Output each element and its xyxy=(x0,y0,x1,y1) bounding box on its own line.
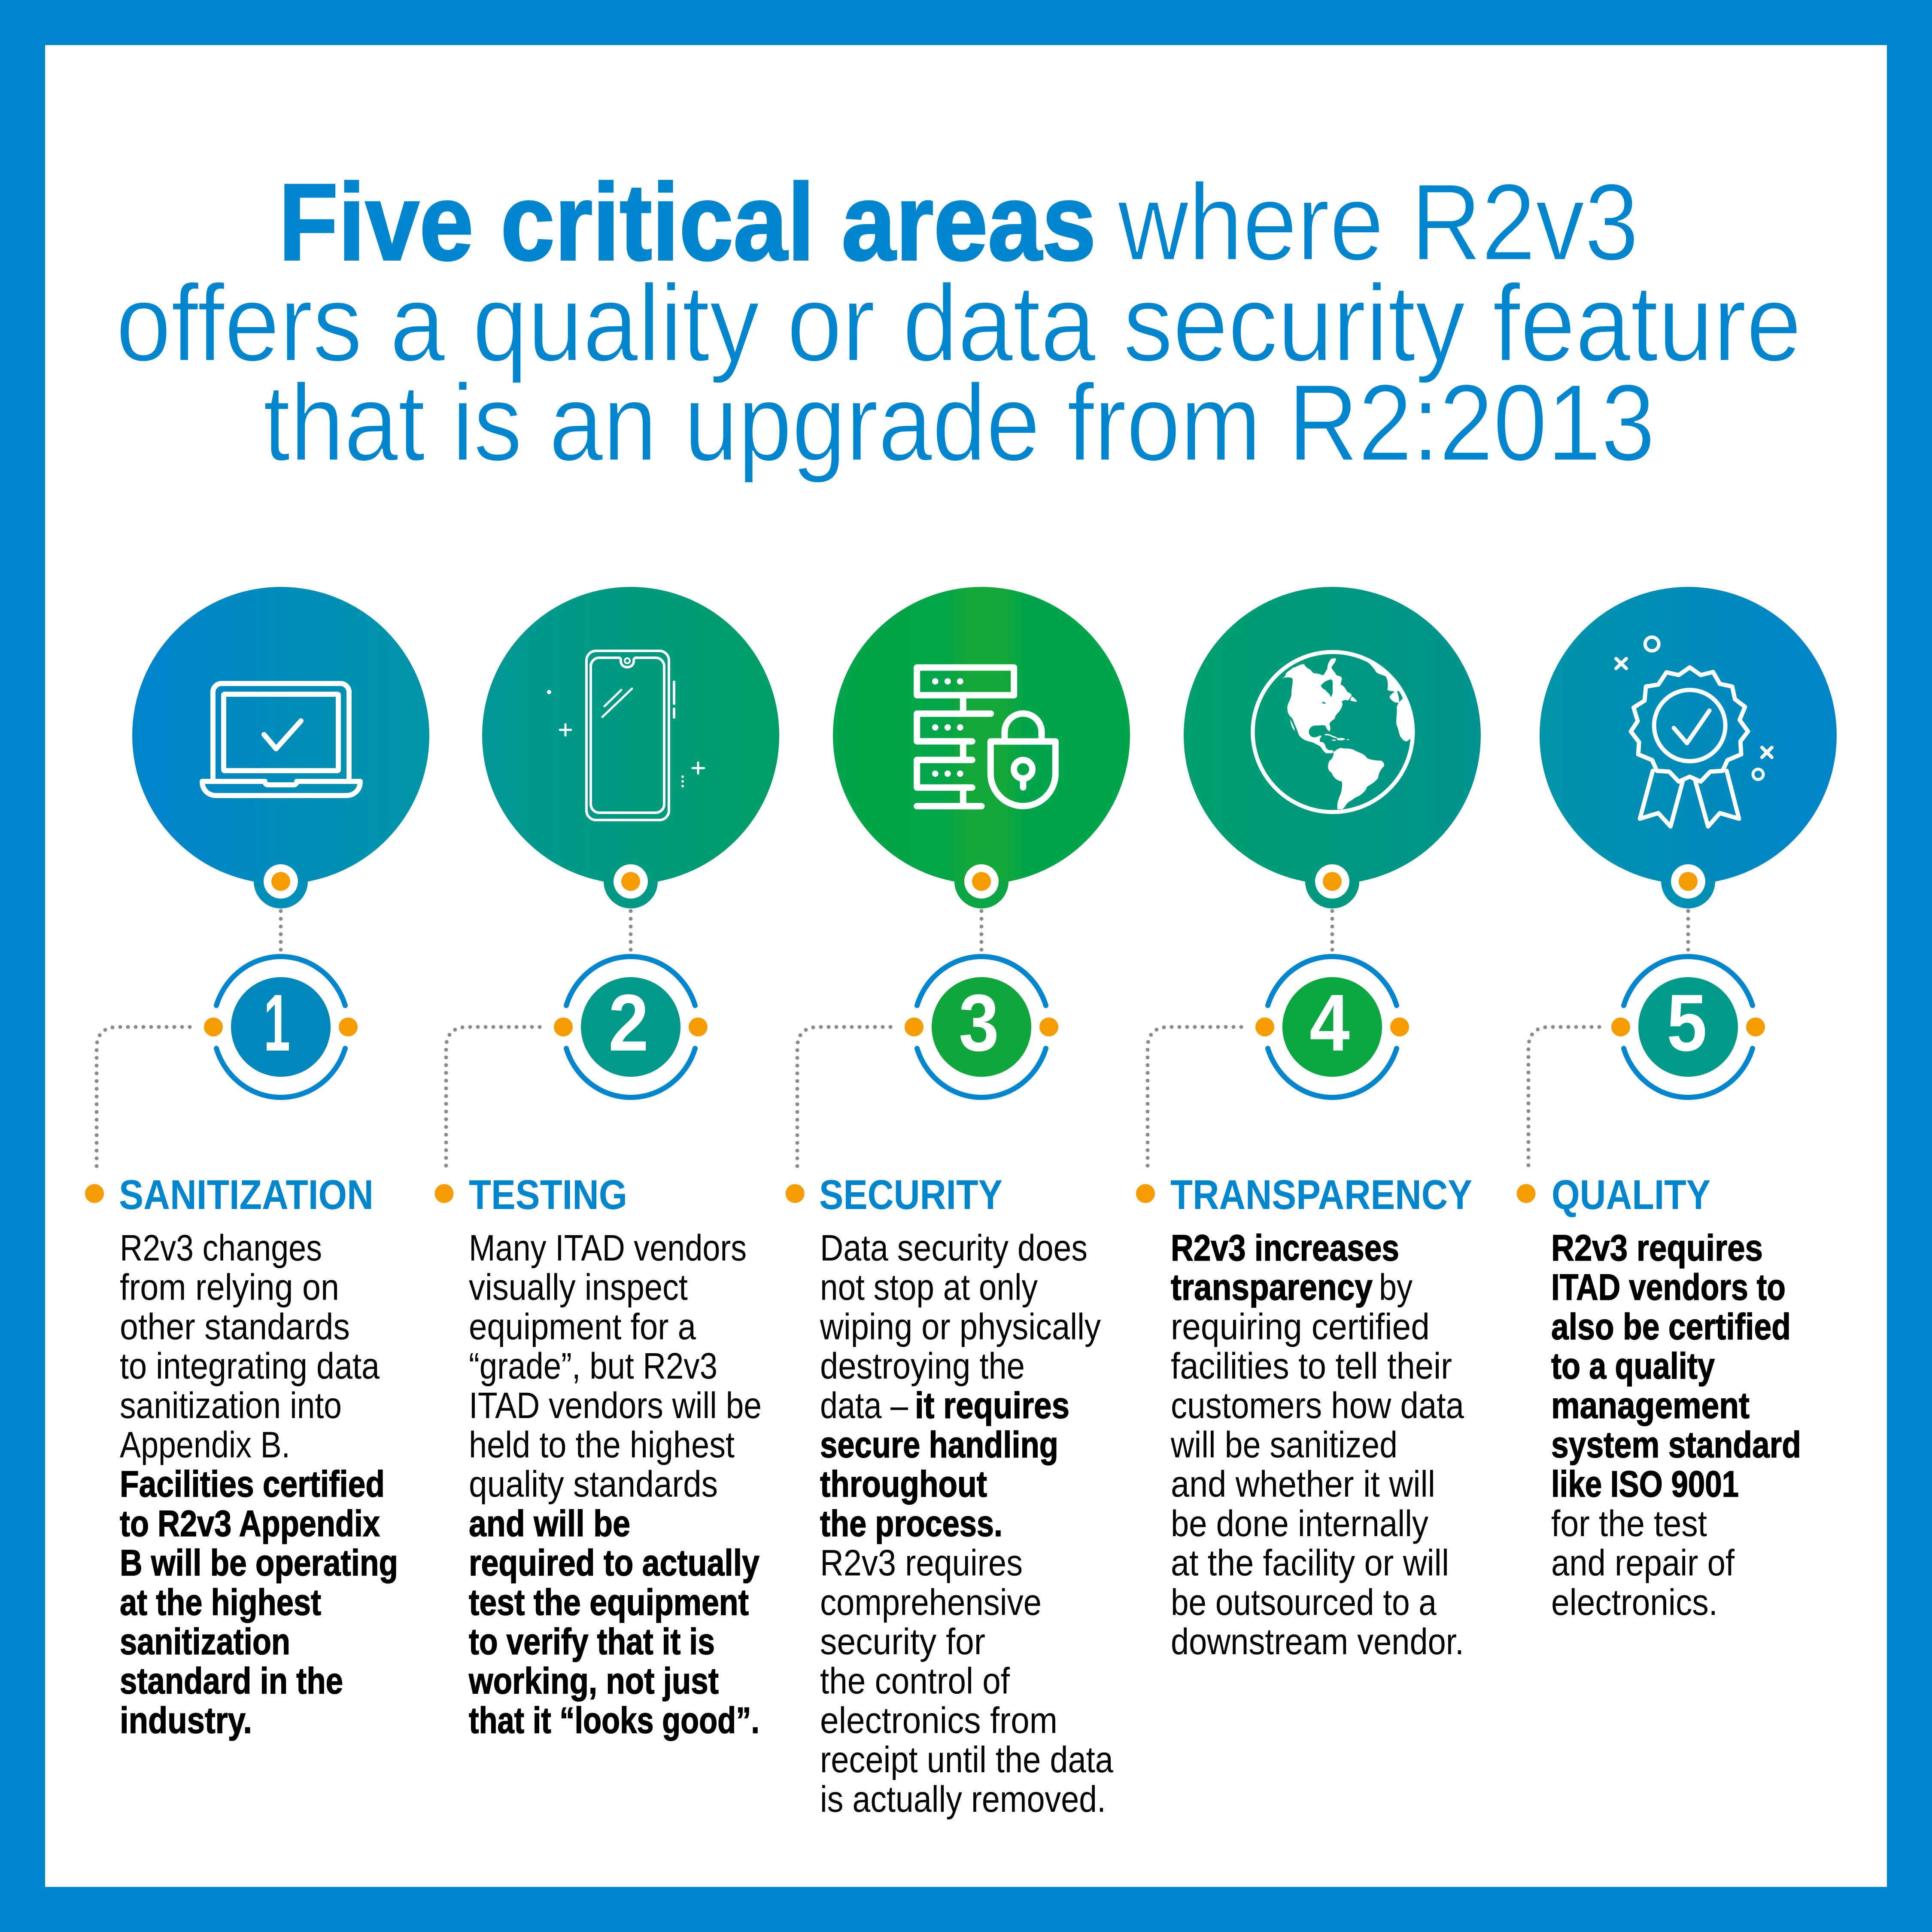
body text: and will be xyxy=(469,1503,630,1544)
body text xyxy=(1551,1227,1801,1623)
body text: requiring certified xyxy=(1171,1306,1430,1347)
icon: laptop with check mark xyxy=(202,683,360,796)
body text: also be certified xyxy=(1551,1306,1791,1347)
body text: Appendix B. xyxy=(120,1425,290,1466)
title: Five critical areas xyxy=(279,161,1096,283)
icon: server stack with padlock xyxy=(917,668,1055,806)
body text: required to actually xyxy=(469,1543,759,1584)
icon: globe showing the Americas xyxy=(1253,652,1413,812)
body text: the control of xyxy=(820,1661,1010,1702)
body text: equipment for a xyxy=(469,1306,696,1347)
body text: to integrating data xyxy=(120,1346,380,1387)
body text: system standard xyxy=(1551,1425,1801,1466)
body text xyxy=(1170,1227,1464,1662)
bullet xyxy=(1517,1184,1536,1203)
body text: R2v3 requires xyxy=(820,1543,1023,1584)
icon: award rosette with check mark xyxy=(1616,637,1772,826)
body text: transparency xyxy=(1171,1267,1373,1308)
body text: downstream vendor. xyxy=(1171,1621,1464,1662)
body text: wiping or physically xyxy=(820,1306,1101,1347)
body text: for the test xyxy=(1551,1503,1707,1544)
number 1 badge: 1 xyxy=(264,978,290,1068)
body text xyxy=(820,1227,1113,1820)
body text: R2v3 increases xyxy=(1171,1227,1399,1269)
body text: security for xyxy=(820,1621,985,1662)
body text: test the equipment xyxy=(469,1582,749,1623)
body text: B will be operating xyxy=(120,1543,398,1584)
panel: column 2 testing xyxy=(434,587,779,1741)
heading: security: SECURITY xyxy=(819,1171,1002,1218)
body text: at the facility or will xyxy=(1171,1543,1449,1584)
dotted connector from number to heading xyxy=(446,1027,540,1169)
body text: to a quality xyxy=(1551,1346,1715,1387)
body text: to verify that it is xyxy=(469,1621,715,1662)
body text: secure handling xyxy=(820,1425,1058,1466)
body text: quality standards xyxy=(469,1464,718,1505)
body text: and whether it will xyxy=(1171,1464,1435,1505)
bullet xyxy=(786,1184,805,1203)
body text: facilities to tell their xyxy=(1171,1346,1452,1387)
body text: electronics from xyxy=(820,1700,1057,1741)
body text: the process. xyxy=(820,1503,1002,1544)
number 5 badge xyxy=(1611,957,1765,1097)
number 5 badge: 5 xyxy=(1667,978,1707,1068)
icon disc with tab xyxy=(1540,587,1837,908)
number 2 badge: 2 xyxy=(608,978,649,1068)
bullet xyxy=(434,1184,453,1203)
dotted connector from number to heading xyxy=(1148,1027,1241,1169)
body text: visually inspect xyxy=(469,1267,688,1308)
body text: other standards xyxy=(120,1306,350,1347)
body text: from relying on xyxy=(120,1267,339,1308)
body text: comprehensive xyxy=(820,1582,1042,1623)
body text: “grade”, but R2v3 xyxy=(469,1346,717,1387)
body text: ITAD vendors to xyxy=(1551,1267,1786,1308)
number 1 badge xyxy=(204,957,358,1097)
icon: smartphone xyxy=(547,651,704,820)
heading: sanitization: SANITIZATION xyxy=(119,1171,374,1218)
body text: at the highest xyxy=(120,1582,321,1623)
body text xyxy=(120,1227,398,1741)
bullet xyxy=(85,1184,104,1203)
body text: R2v3 changes xyxy=(120,1227,322,1269)
body text: held to the highest xyxy=(469,1425,735,1466)
number 4 badge: 4 xyxy=(1309,978,1350,1068)
number 3 badge xyxy=(905,957,1058,1097)
body text: it requires xyxy=(915,1385,1069,1426)
heading: transparency: TRANSPARENCY xyxy=(1170,1171,1472,1218)
panel: column 5 quality xyxy=(1517,587,1837,1623)
dotted connector from icon to number xyxy=(980,911,983,956)
body text: R2v3 requires xyxy=(1551,1227,1763,1269)
body text: working, not just xyxy=(468,1661,719,1702)
title: that is an upgrade from R2:2013 xyxy=(263,361,1655,483)
body text: like ISO 9001 xyxy=(1551,1464,1739,1505)
icon disc with tab xyxy=(132,587,429,908)
body text: customers how data xyxy=(1171,1385,1464,1426)
dotted connector from number to heading xyxy=(97,1027,190,1169)
body text: destroying the xyxy=(820,1346,1025,1387)
body text: and repair of xyxy=(1551,1543,1735,1584)
body text: throughout xyxy=(820,1464,987,1505)
body text: receipt until the data xyxy=(820,1739,1113,1780)
body text xyxy=(468,1227,762,1741)
body text: data – xyxy=(820,1385,908,1426)
title: where R2v3 xyxy=(1118,161,1639,283)
heading: testing: TESTING xyxy=(469,1171,627,1218)
body text: be outsourced to a xyxy=(1171,1582,1437,1623)
body text: will be sanitized xyxy=(1170,1425,1397,1466)
number 4 badge xyxy=(1255,957,1409,1097)
body text: electronics. xyxy=(1551,1582,1718,1623)
dotted connector from icon to number xyxy=(279,911,283,956)
body text: sanitization into xyxy=(120,1385,342,1426)
dotted connector from number to heading xyxy=(797,1027,890,1169)
body text: Facilities certified xyxy=(120,1464,385,1505)
body text: to R2v3 Appendix xyxy=(120,1503,380,1544)
icon disc with tab xyxy=(833,587,1130,908)
body text: ITAD vendors will be xyxy=(469,1385,762,1426)
body text: management xyxy=(1551,1385,1750,1426)
body text: Data security does xyxy=(820,1227,1088,1269)
body text: is actually removed. xyxy=(820,1779,1106,1820)
panel: column 3 security xyxy=(786,587,1130,1820)
dotted connector from number to heading xyxy=(1528,1027,1599,1169)
dotted connector from icon to number xyxy=(1686,911,1690,956)
panel: column 4 transparency xyxy=(1136,587,1481,1662)
icon disc with tab xyxy=(482,587,779,908)
dotted connector from icon to number xyxy=(1330,911,1334,956)
title xyxy=(116,161,1801,483)
body text: not stop at only xyxy=(820,1267,1038,1308)
body text: that it “looks good”. xyxy=(469,1700,759,1741)
body text: sanitization xyxy=(120,1621,290,1662)
body text: by xyxy=(1379,1267,1413,1308)
heading: quality: QUALITY xyxy=(1552,1171,1710,1218)
dotted connector from icon to number xyxy=(629,911,633,956)
panel: column 1 sanitization xyxy=(85,587,429,1741)
bullet xyxy=(1136,1184,1155,1203)
title: offers a quality or data security feature xyxy=(116,262,1801,384)
body text: industry. xyxy=(120,1700,252,1741)
body text: Many ITAD vendors xyxy=(469,1227,747,1269)
icon disc with tab xyxy=(1184,587,1481,908)
body text: be done internally xyxy=(1171,1503,1428,1544)
number 3 badge: 3 xyxy=(959,978,999,1068)
body text: standard in the xyxy=(120,1661,343,1702)
number 2 badge xyxy=(554,957,708,1097)
